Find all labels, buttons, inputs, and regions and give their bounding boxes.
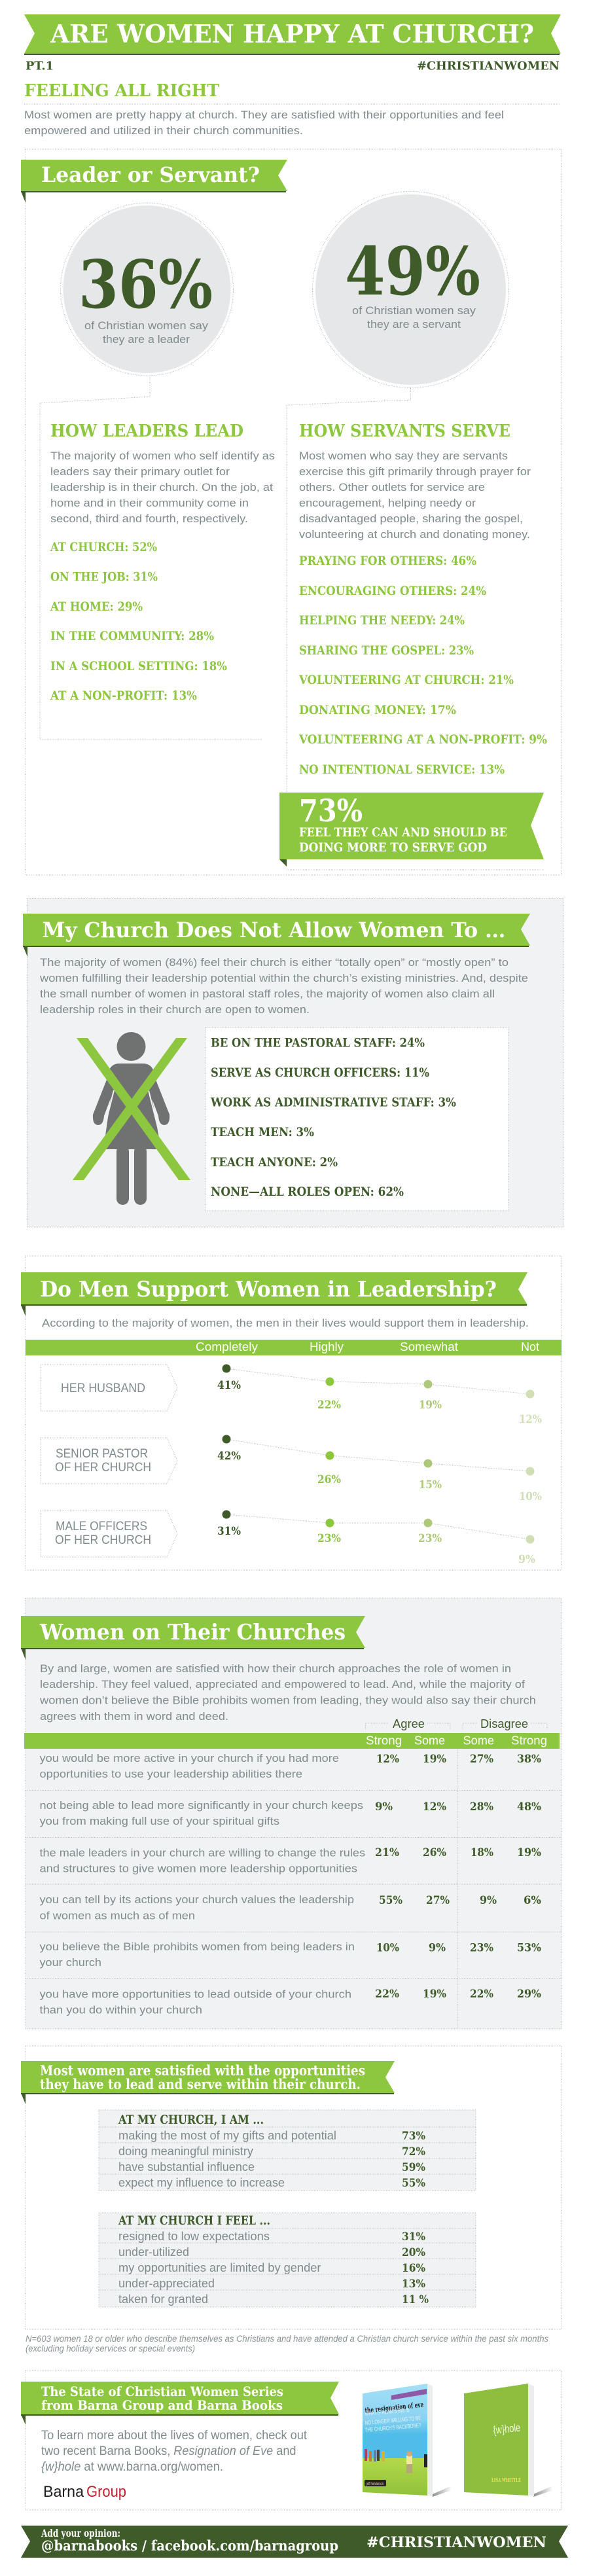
row: male officers: 23%: [317, 1532, 341, 1545]
leaders list: IN THE COMMUNITY: 28%: [50, 629, 214, 643]
table row 4: you can tell by its actions your church values the leadership: [39, 1893, 354, 1906]
body text: agrees with them in word and deed.: [40, 1710, 228, 1723]
banner: most women are satisfied: Most women are satisfied with the opportunities: [40, 2062, 365, 2079]
servants body text: Most women who say they are servants: [299, 450, 508, 462]
table row 5: your church: [39, 1956, 101, 1969]
list: roles not allowed: TEACH ANYONE: 2%: [211, 1155, 338, 1170]
scale header bar: [26, 1340, 562, 1355]
callout: 73%: DOING MORE TO SERVE GOD: [299, 840, 487, 855]
banner: my church does not allow: [23, 914, 530, 957]
banner: women on their churches: Women on Their Churches: [39, 1619, 346, 1645]
callout: 73%: [279, 793, 544, 867]
table row 2: 48%: [517, 1800, 541, 1814]
leaders body text: leaders say their primary outlet for: [50, 465, 230, 478]
row: male officers: 9%: [518, 1553, 535, 1566]
body text: the small number of women in pastoral staff roles, the majority of women also claim all: [40, 988, 495, 1000]
table row 6: [39, 1988, 541, 2016]
panel: leader or servant: [21, 149, 562, 875]
body text: leadership roles in their church are open to women.: [40, 1003, 310, 1016]
table row 4: [39, 1893, 541, 1922]
leaders body text: leadership is in their church. On the job, at: [50, 481, 273, 493]
banner: leader or servant: Leader or Servant?: [41, 162, 260, 187]
body text: women don’t believe the Bible prohibits women from leading, they would also say their church: [39, 1694, 536, 1707]
table: at my church I am: 55%: [402, 2177, 425, 2190]
row: male officers: [41, 1511, 535, 1566]
leaders body text: second, third and fourth, respectively.: [50, 512, 248, 525]
callout: 73%: FEEL THEY CAN AND SHOULD BE: [299, 825, 507, 840]
list: roles not allowed: BE ON THE PASTORAL STAFF: 24%: [211, 1035, 425, 1050]
table row 2: [39, 1799, 541, 1827]
add your opinion: Add your opinion:: [41, 2527, 120, 2539]
table: at my church I am: have substantial influence: [118, 2160, 255, 2174]
part label: PT.1: [26, 59, 54, 73]
servants list: ENCOURAGING OTHERS: 24%: [299, 584, 486, 598]
row: male officers: MALE OFFICERS: [56, 1520, 147, 1533]
table header bar: Strong: [511, 1734, 547, 1747]
scale header bar: Somewhat: [400, 1340, 458, 1353]
servants body text: [299, 450, 531, 541]
row: her husband: 41%: [217, 1379, 241, 1392]
table row 5: [39, 1941, 541, 1969]
table row 6: 22%: [470, 1988, 493, 2001]
logo: barna group: [43, 2483, 126, 2501]
body text: women fulfilling their leadership potential within the church’s existing ministries. And, despite: [39, 972, 528, 984]
book: the resignation of eve: the resignation of eve: [365, 2401, 424, 2415]
servants body text: volunteering at church and donating money.: [299, 528, 530, 541]
list: roles not allowed: TEACH MEN: 3%: [211, 1125, 314, 1139]
icon: crossed-out woman: [73, 1032, 190, 1205]
banner: do men support: [21, 1272, 527, 1316]
leaders body text: home and in their community come in: [50, 497, 249, 509]
table header bar: Strong: [366, 1734, 402, 1747]
servants list: VOLUNTEERING AT A NON-PROFIT: 9%: [298, 732, 547, 747]
table: at my church I feel: taken for granted: [118, 2293, 208, 2306]
row: male officers: 31%: [217, 1525, 241, 1538]
list: roles not allowed: [205, 1028, 509, 1211]
panel: my church does not allow women to: [23, 898, 563, 1227]
table row 6: 19%: [423, 1988, 446, 2001]
servants body text: encouragement, helping needy or: [299, 497, 476, 509]
intro text: [24, 109, 504, 137]
stat circle: 49% servants: 49%: [345, 232, 480, 310]
book: the resignation of eve: WHAT IF ADAM'S RIB IS: [365, 2406, 410, 2417]
table row 2: not being able to lead more significantly in your church keeps: [39, 1799, 363, 1812]
table row 2: you from making full use of your spiritual gifts: [39, 1815, 279, 1827]
table row 4: of women as much as of men: [39, 1910, 195, 1922]
table: at my church I feel: my opportunities are limited by gender: [118, 2261, 321, 2274]
table: at my church I am: 59%: [402, 2161, 425, 2174]
book: whole: [464, 2384, 553, 2497]
agree / disagree labels: Agree: [393, 1717, 425, 1730]
title: ARE WOMEN HAPPY AT CHURCH?: [50, 19, 534, 48]
banner: do men support: Do Men Support Women in Leadership?: [40, 1276, 497, 1302]
table row 4: 55%: [379, 1894, 402, 1907]
row: senior pastor: 10%: [519, 1490, 542, 1503]
table row 1: 19%: [423, 1753, 446, 1766]
panel: most women are satisfied: [21, 2046, 562, 2329]
table row 3: 18%: [471, 1846, 493, 1859]
scale header bar: Completely: [196, 1340, 258, 1353]
table row 4: 27%: [426, 1894, 450, 1907]
body text: [41, 2429, 308, 2474]
row: male officers: OF HER CHURCH: [55, 1533, 151, 1547]
table row 5: 53%: [517, 1941, 541, 1954]
body text: two recent Barna Books, Resignation of Eve and: [41, 2444, 296, 2458]
table row 3: 19%: [517, 1846, 541, 1859]
table: at my church I am: doing meaningful ministry: [118, 2145, 253, 2158]
body text: leadership. They feel valued, appreciated and empowered to lead. And, while the majority of: [40, 1678, 525, 1690]
stat circle: 49% servants: of Christian women say: [352, 304, 476, 317]
servants list: NO INTENTIONAL SERVICE: 13%: [299, 762, 505, 777]
table header bar: Some: [463, 1734, 494, 1747]
table: at my church I feel: AT MY CHURCH I FEEL ...: [118, 2213, 270, 2228]
hashtag: #CHRISTIANWOMEN: [417, 59, 560, 73]
list: roles not allowed: NONE—ALL ROLES OPEN: 62%: [211, 1185, 404, 1199]
panel: women on their churches: [21, 1598, 562, 2029]
servants list: DONATING MONEY: 17%: [299, 703, 456, 717]
body text: [39, 956, 528, 1016]
agree / disagree labels: [365, 1717, 547, 1730]
banner: most women are satisfied: [21, 2061, 395, 2104]
column: how servants serve: HOW SERVANTS SERVE: [299, 421, 510, 441]
row: senior pastor: OF HER CHURCH: [55, 1461, 151, 1475]
table: at my church I am: 72%: [402, 2145, 425, 2158]
table row 1: you would be more active in your church if you had more: [39, 1752, 339, 1764]
row: her husband: 19%: [419, 1399, 442, 1412]
table: at my church I feel: 31%: [402, 2230, 425, 2244]
intro text: empowered and utilized in their church communities.: [24, 124, 303, 137]
servants list: PRAYING FOR OTHERS: 46%: [299, 554, 476, 568]
row: her husband: 22%: [317, 1399, 341, 1412]
body text: [39, 1662, 536, 1723]
book: whole: LISA WHITTLE: [491, 2477, 521, 2483]
row: her husband: [41, 1364, 542, 1426]
row: senior pastor: 15%: [419, 1478, 442, 1492]
servants body text: disadvantaged people, sharing the gospel,: [299, 512, 523, 525]
table row 1: [39, 1752, 541, 1780]
footer hashtag: #CHRISTIANWOMEN: [366, 2534, 546, 2551]
table: at my church I feel: under-utilized: [118, 2245, 189, 2259]
book: the resignation of eve: jeff henderson: [366, 2482, 384, 2486]
servants list: [298, 554, 547, 777]
table: at my church I am: expect my influence to increase: [118, 2176, 285, 2189]
table row 1: opportunities to use your leadership abilities there: [39, 1768, 302, 1780]
table header bar: [24, 1733, 560, 1749]
servants list: SHARING THE GOSPEL: 23%: [299, 643, 474, 658]
panel: state of christian women series: [21, 2370, 562, 2510]
table row 6: than you do within your church: [39, 2004, 202, 2016]
row: senior pastor: 42%: [217, 1450, 241, 1463]
table row 2: 9%: [375, 1800, 393, 1814]
body text: According to the majority of women, the men in their lives would support them in leadership.: [42, 1317, 529, 1329]
table row 6: 22%: [375, 1988, 399, 2001]
servants list: VOLUNTEERING AT CHURCH: 21%: [298, 673, 514, 687]
logo: barna group: Barna: [43, 2483, 84, 2501]
table row 3: 21%: [375, 1846, 399, 1859]
table: at my church I feel: under-appreciated: [118, 2277, 215, 2290]
table row 3: [39, 1846, 541, 1874]
table: at my church I feel: resigned to low expectations: [118, 2230, 270, 2243]
body text: By and large, women are satisfied with how their church approaches the role of women in: [40, 1662, 511, 1675]
table: at my church I feel: 13%: [402, 2278, 425, 2291]
stat circle: 36% leaders: 36%: [79, 245, 213, 323]
table: at my church I am: making the most of my gifts and potential: [118, 2129, 336, 2142]
row: senior pastor: 26%: [317, 1473, 341, 1486]
book: whole: {w}hole: [492, 2422, 521, 2437]
stat circle: 36% leaders: of Christian women say: [84, 319, 209, 332]
table row 5: 23%: [470, 1941, 493, 1954]
leaders list: AT CHURCH: 52%: [50, 540, 157, 554]
table: at my church I feel: [99, 2213, 476, 2307]
table row 2: 12%: [423, 1800, 446, 1814]
banner: state of christian women series: from Barna Group and Barna Books: [41, 2397, 283, 2413]
leaders list: IN A SCHOOL SETTING: 18%: [50, 659, 227, 673]
table row 3: the male leaders in your church are willing to change the rules: [39, 1847, 365, 1859]
table row 1: 27%: [470, 1753, 493, 1766]
scale header bar: Not: [521, 1340, 539, 1353]
banner: women on their churches: [21, 1616, 365, 1660]
table: at my church I feel: 11 %: [402, 2293, 429, 2306]
table row 5: 10%: [376, 1941, 399, 1954]
banner: state of christian women series: The State of Christian Women Series: [41, 2384, 283, 2399]
title ribbon: [24, 14, 561, 55]
row: her husband: HER HUSBAND: [61, 1382, 145, 1395]
list: roles not allowed: WORK AS ADMINISTRATIVE STAFF: 3%: [210, 1096, 456, 1110]
book: the resignation of eve: [363, 2384, 452, 2497]
banner: most women are satisfied: they have to lead and serve within their church.: [40, 2076, 361, 2092]
table header bar: Some: [414, 1734, 445, 1747]
row: senior pastor: SENIOR PASTOR: [56, 1447, 148, 1461]
table row 4: 6%: [524, 1894, 541, 1907]
banner: my church does not allow: My Church Does Not Allow Women To …: [42, 918, 505, 942]
body text: The majority of women (84%) feel their church is either “totally open” or “mostly open” to: [40, 956, 509, 969]
table row 1: 12%: [376, 1753, 399, 1766]
leaders list: AT A NON-PROFIT: 13%: [50, 689, 197, 703]
leaders list: [50, 540, 227, 703]
table row 2: 28%: [470, 1800, 493, 1814]
table row 6: 29%: [517, 1988, 541, 2001]
table row 4: 9%: [480, 1894, 497, 1907]
intro text: Most women are pretty happy at church. They are satisfied with their opportunities and feel: [24, 109, 504, 121]
leaders list: ON THE JOB: 31%: [50, 569, 158, 584]
footer ribbon: [21, 2526, 568, 2558]
panel: do men support women in leadership: [21, 1256, 562, 1570]
methodology note: (excluding holiday services or special events): [26, 2343, 195, 2353]
column: how leaders lead: HOW LEADERS LEAD: [50, 421, 243, 441]
stat circle: 36% leaders: [60, 203, 233, 376]
callout: 73%: 73%: [299, 793, 363, 829]
table row 5: 9%: [429, 1941, 446, 1954]
agree / disagree labels: Disagree: [480, 1717, 528, 1730]
table: at my church I am: 73%: [402, 2130, 425, 2143]
table: at my church I am: [99, 2110, 476, 2191]
section heading: feeling all right: FEELING ALL RIGHT: [24, 81, 220, 101]
row: male officers: 23%: [418, 1532, 442, 1545]
table row 3: 26%: [423, 1846, 446, 1859]
table row 1: 38%: [517, 1753, 541, 1766]
servants body text: exercise this gift primarily through prayer for: [299, 465, 531, 478]
leaders list: AT HOME: 29%: [50, 599, 143, 614]
servants list: HELPING THE NEEDY: 24%: [299, 613, 465, 628]
row: senior pastor: [41, 1435, 542, 1503]
column: how leaders lead: [50, 421, 275, 703]
scale header bar: Highly: [310, 1340, 344, 1353]
banner: leader or servant: [21, 160, 287, 203]
stat circle: 49% servants: they are a servant: [367, 318, 461, 331]
book: the resignation of eve: THE CHURCH'S BACKBONE?: [365, 2422, 421, 2433]
body text: To learn more about the lives of women, check out: [41, 2429, 308, 2442]
leaders body text: [50, 450, 275, 525]
servants body text: others. Other outlets for service are: [299, 481, 485, 493]
social handles: @barnabooks / facebook.com/barnagroup: [41, 2537, 338, 2554]
stat circle: 49% servants: [313, 191, 509, 387]
table row 6: you have more opportunities to lead outside of your church: [39, 1988, 351, 2000]
table: at my church I am: AT MY CHURCH, I AM ...: [118, 2113, 264, 2127]
banner: state of christian women series: [21, 2382, 339, 2425]
column: how servants serve: [298, 421, 547, 777]
list: roles not allowed: SERVE AS CHURCH OFFICERS: 11%: [211, 1065, 429, 1080]
table row 3: and structures to give women more leadership opportunities: [39, 1863, 357, 1874]
table row 5: you believe the Bible prohibits women from being leaders in: [39, 1941, 355, 1953]
body text: {w}hole at www.barna.org/women.: [41, 2460, 223, 2474]
methodology note: [26, 2333, 548, 2353]
row: her husband: 12%: [519, 1413, 542, 1426]
stat circle: 36% leaders: they are a leader: [103, 333, 190, 346]
logo: barna group: Group: [86, 2483, 126, 2501]
book: the resignation of eve: NO LONGER WILLING TO BE: [365, 2415, 421, 2426]
table: at my church I feel: 16%: [402, 2262, 425, 2275]
table: at my church I feel: 20%: [402, 2246, 425, 2259]
methodology note: N=603 women 18 or older who describe themselves as Christians and have attended a Christian church service within the past six months: [26, 2333, 548, 2344]
leaders body text: The majority of women who self identify as: [50, 450, 275, 462]
